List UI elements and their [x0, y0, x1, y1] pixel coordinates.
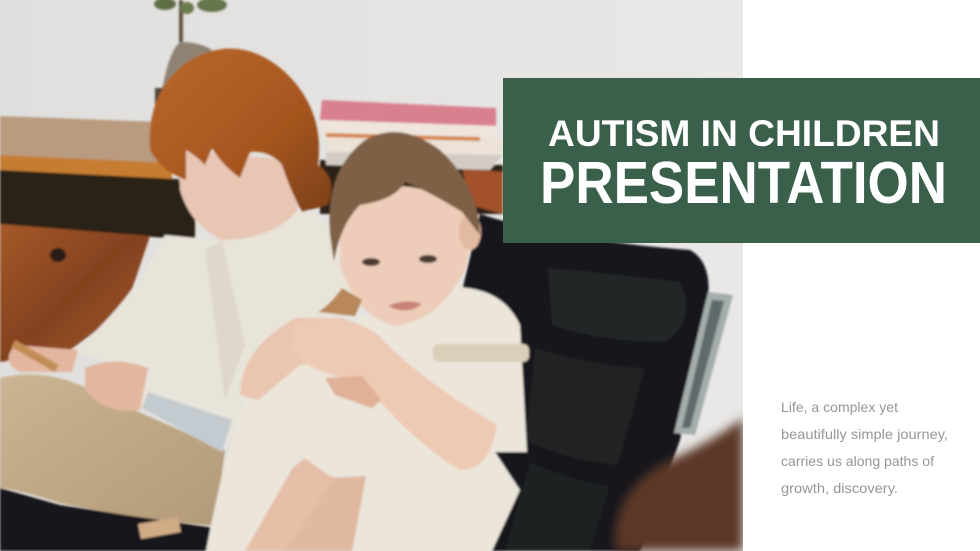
- girl legs: [243, 458, 335, 551]
- boy hands: [9, 345, 148, 411]
- blurred foreground head: [615, 418, 743, 551]
- title line 2: PRESENTATION: [540, 150, 947, 216]
- body text: [781, 399, 948, 496]
- girl hair: [329, 132, 480, 262]
- girl arms: [240, 318, 345, 400]
- body text: Life, a complex yet: [781, 399, 898, 415]
- sideboard: [0, 116, 503, 362]
- chair chrome arm: [674, 292, 733, 435]
- girl: [206, 132, 529, 551]
- girl dress: [206, 287, 527, 551]
- boy face: [178, 150, 298, 240]
- boy hair: [150, 48, 331, 212]
- title line 1: AUTISM IN CHILDREN: [548, 113, 940, 154]
- body text: growth, discovery.: [781, 480, 898, 496]
- body text: beautifully simple journey,: [781, 426, 948, 442]
- title banner: [503, 78, 980, 243]
- photo: two children on a black chair: [0, 0, 743, 551]
- boy shirt: [72, 208, 360, 452]
- boy trousers: [0, 374, 225, 526]
- girl neck and face: [340, 186, 470, 326]
- wooden toy block: [138, 517, 181, 539]
- stack of books: [320, 100, 503, 170]
- boy: [0, 48, 360, 526]
- black leather chair: [0, 214, 709, 551]
- plant in vase: [154, 0, 227, 108]
- body text: carries us along paths of: [781, 453, 934, 469]
- wall background: [0, 0, 743, 551]
